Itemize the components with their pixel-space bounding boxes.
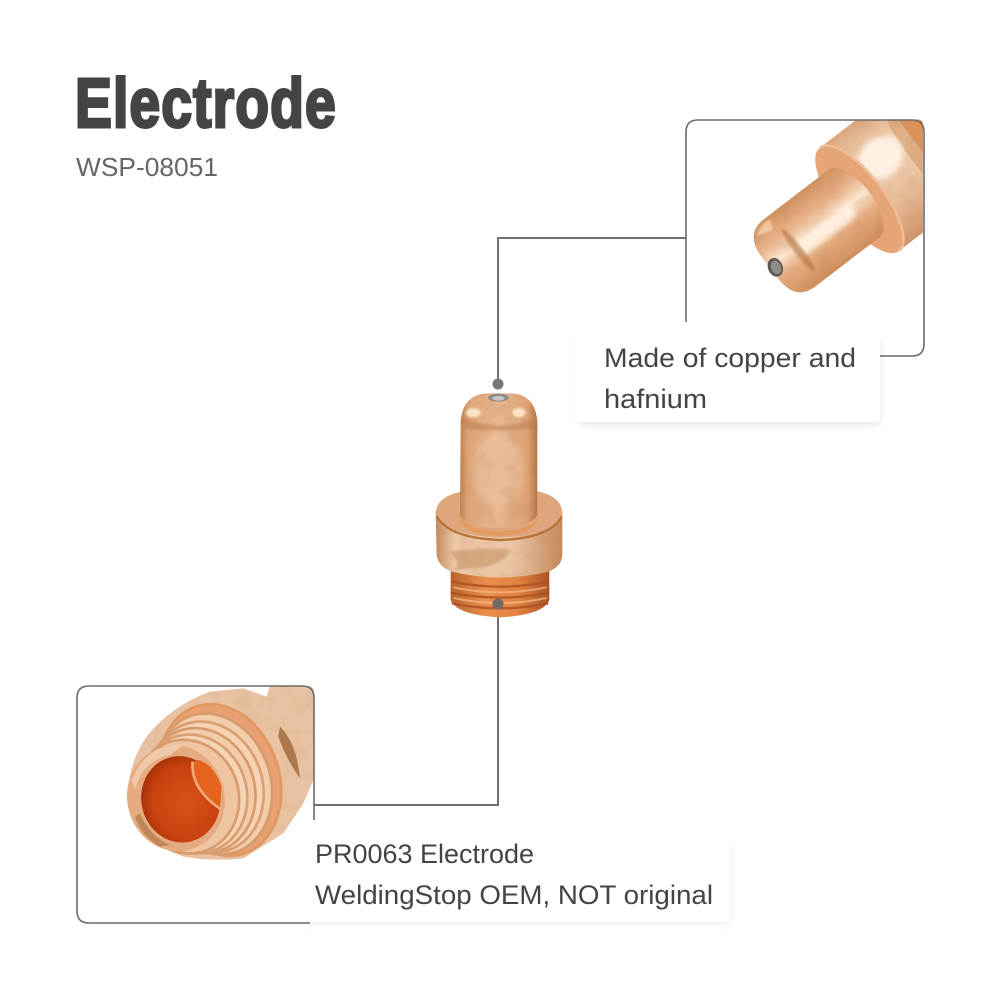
callout: material: hafnium	[604, 384, 707, 414]
shaft	[754, 168, 884, 292]
flange	[436, 492, 562, 577]
title: Electrode	[75, 65, 336, 143]
nozzle rim	[127, 745, 225, 852]
flange face	[815, 147, 902, 254]
callout: part number: PR0063 Electrode	[315, 839, 534, 869]
hafnium insert	[768, 258, 783, 277]
inset: electrode thread detail	[127, 686, 314, 860]
callout: material: Made of copper and	[604, 343, 856, 373]
thread rings	[149, 702, 283, 858]
anchor dot: tip	[492, 378, 504, 390]
callout: material	[575, 332, 880, 425]
inset: electrode tip detail	[754, 119, 923, 292]
hex body	[128, 686, 315, 860]
connector: thread to bottom inset	[314, 604, 498, 805]
main electrode illustration	[436, 393, 562, 617]
bore	[141, 756, 220, 842]
thread	[898, 119, 923, 152]
connector: tip to top inset	[498, 238, 686, 385]
anchor dot: thread	[492, 598, 504, 610]
subtitle: model number: WSP-08051	[76, 152, 218, 182]
callout: part number: WeldingStop OEM, NOT original	[315, 880, 713, 910]
thread	[451, 570, 549, 617]
shaft	[460, 393, 538, 536]
flange body	[819, 120, 923, 252]
inset frame: bottom left	[77, 686, 314, 923]
inset frame: top right	[686, 120, 924, 356]
callout: part number	[300, 825, 730, 924]
